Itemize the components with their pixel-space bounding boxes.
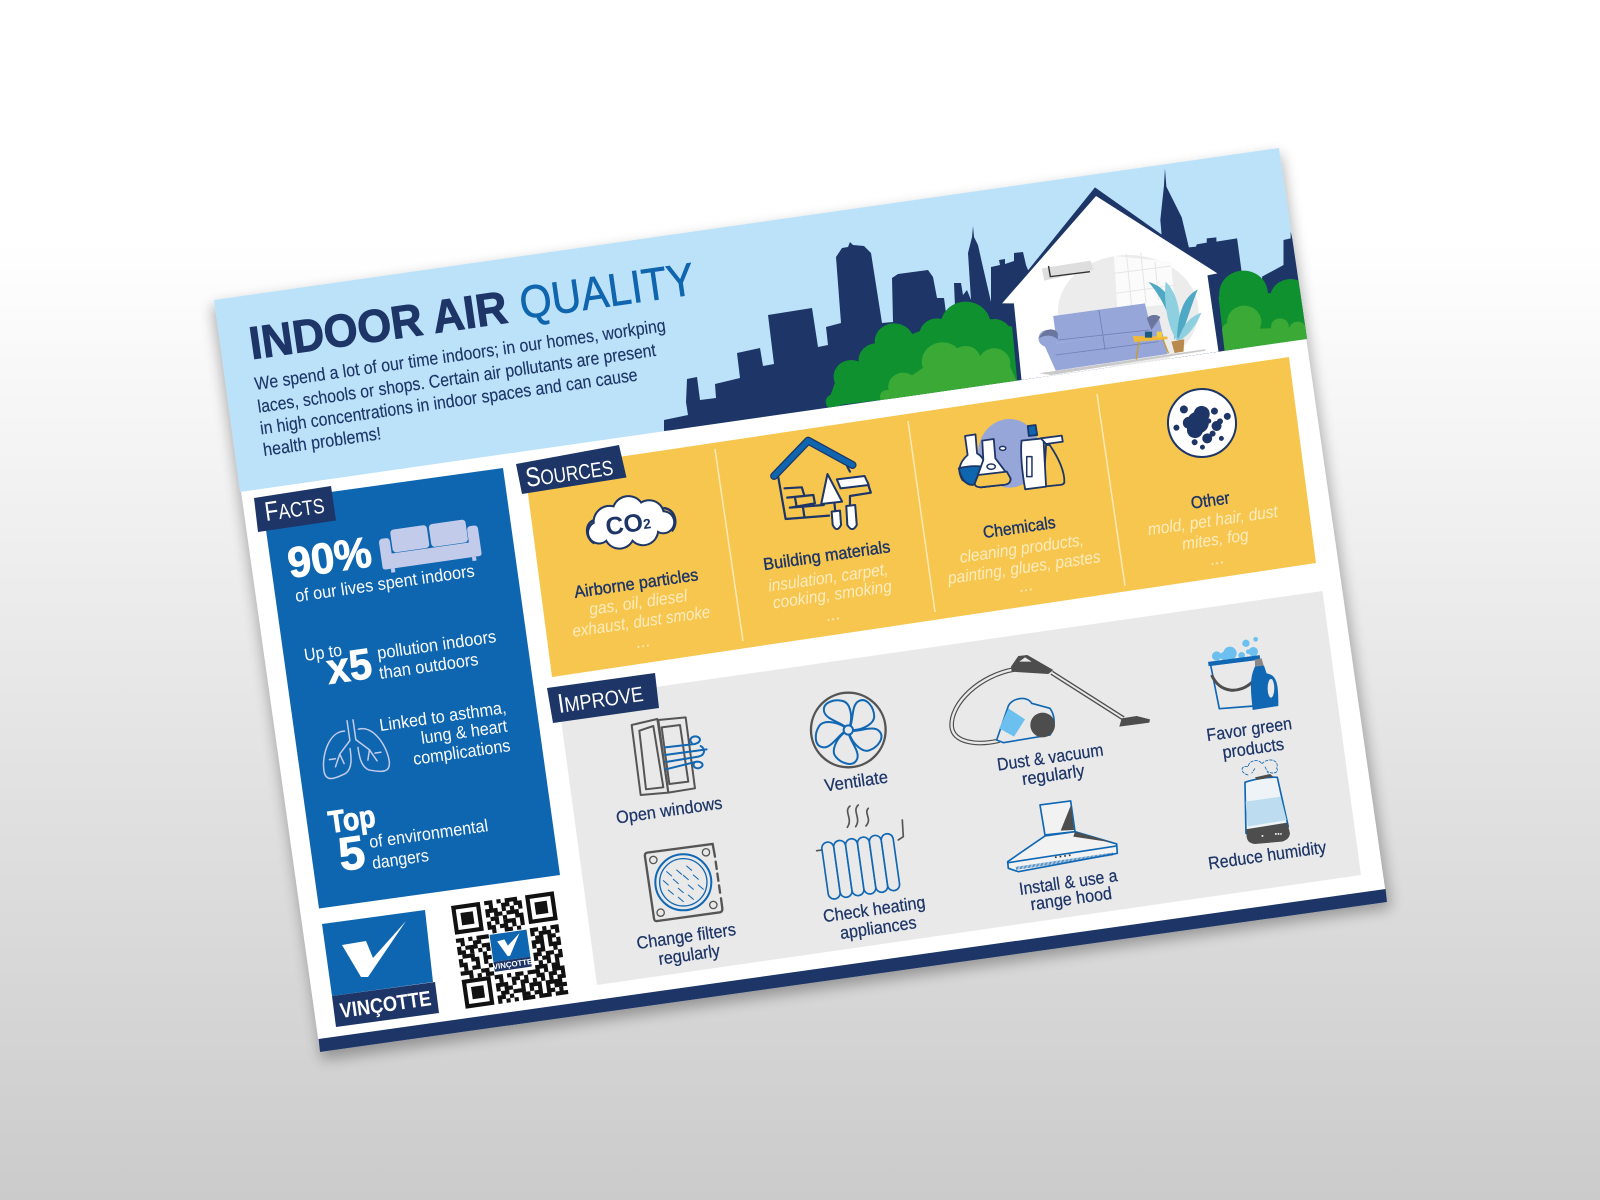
sofa: [1038, 303, 1167, 371]
title: QUALITY: [516, 252, 698, 329]
source: chemicals: [946, 419, 1102, 596]
city skyline, trees and house illustration: [664, 168, 1316, 431]
fact: x5: pollution indoors: [376, 626, 498, 663]
action: range hood: range hood: [1029, 883, 1113, 914]
fact: x5: [303, 626, 498, 694]
fact: linked to asthma: Linked to asthma,: [378, 697, 508, 735]
fact: x5: x5: [324, 640, 375, 694]
source: airborne particles: ...: [635, 631, 652, 652]
icon: lungs: [317, 716, 391, 780]
icon: CO2 cloud: CO: [604, 508, 645, 541]
logo: Vinçotte: [322, 910, 439, 1027]
source: chemicals: Chemicals: [982, 513, 1057, 542]
source: other: Other: [1190, 488, 1231, 513]
icon: mold in petri dish: [1164, 385, 1240, 461]
action: change filters: [635, 844, 737, 969]
action: ventilate: Ventilate: [823, 767, 889, 795]
panel: facts: [254, 468, 560, 908]
action: change filters: Change filters: [635, 919, 737, 953]
icon: CO2 cloud: 2: [642, 515, 652, 532]
fact: linked to asthma: complications: [412, 735, 512, 769]
action: favor green products: Favor green: [1205, 713, 1293, 745]
trees right: [1219, 271, 1316, 351]
icon: vacuum cleaner: [952, 655, 1150, 743]
icon: filter: [645, 844, 722, 921]
fact: 90%: of our lives spent indoors: [294, 560, 476, 606]
action: open windows: [615, 717, 724, 828]
intro paragraph: in high concentrations in indoor spaces and can cause: [259, 365, 639, 438]
trees left: [826, 302, 1017, 409]
fact: linked to asthma: [317, 697, 512, 780]
action: favor green products: [1205, 637, 1293, 762]
improve tag: IMPROVE: [556, 677, 645, 719]
source: airborne particles: gas, oil, diesel: [588, 586, 690, 619]
intro paragraph: [253, 315, 667, 460]
source: building materials: insulation, carpet,: [767, 560, 889, 596]
fact: top 5: [326, 799, 489, 881]
QR code: [451, 891, 568, 1009]
action: dust and vacuum: [952, 655, 1150, 789]
icon: CO2 cloud: [583, 491, 678, 552]
fact: x5: than outdoors: [378, 649, 480, 683]
panel: sources: [516, 357, 1316, 677]
icon: fan: [811, 693, 886, 767]
source: other: mold, pet hair, dust: [1147, 502, 1280, 539]
fact: top 5: Top: [326, 799, 378, 840]
action: favor green products: products: [1221, 734, 1285, 762]
source: other: mites, fog: [1181, 525, 1250, 554]
air conditioner: [1042, 261, 1094, 281]
source: airborne particles: exhaust, dust smoke: [571, 602, 711, 641]
floor shadow: [1039, 349, 1206, 375]
title: [246, 252, 698, 369]
icon: house under construction: [774, 441, 871, 529]
action: open windows: Open windows: [615, 793, 724, 828]
icon: sofa: [377, 517, 482, 574]
source: airborne particles: [571, 491, 711, 652]
facts tag: FACTS: [263, 489, 326, 527]
action: reduce humidity: [1207, 760, 1328, 873]
fact: 90%: 90%: [285, 528, 375, 588]
action: change filters: regularly: [657, 940, 721, 969]
action: check heating: [817, 805, 927, 943]
header: sky background: [214, 148, 1307, 492]
dividers: [715, 394, 1125, 641]
title: INDOOR AIR: [246, 281, 510, 369]
icon: humidifier: [1242, 760, 1290, 844]
source: building materials: [762, 441, 893, 625]
fact: top 5: dangers: [371, 845, 430, 873]
intro paragraph: health problems!: [262, 423, 382, 460]
source: building materials: Building materials: [762, 537, 891, 574]
source: building materials: ...: [825, 604, 842, 625]
action: dust and vacuum: Dust & vacuum: [996, 740, 1105, 775]
icon: window: [632, 717, 707, 795]
source: other: [1147, 385, 1280, 569]
source: building materials: cooking, smoking: [771, 577, 893, 612]
panel: improve: [547, 591, 1361, 985]
QR centre logo: VINÇOTTE: [492, 957, 533, 972]
house: [1022, 187, 1222, 380]
fact: 90%: [285, 517, 482, 606]
icon: range hood: [1008, 801, 1117, 872]
room: wall circle and window: [1058, 255, 1199, 368]
fact: linked to asthma: lung & heart: [420, 716, 509, 748]
sources tag: SOURCES: [524, 451, 615, 493]
icon: flasks and cleaning bottles: [959, 419, 1064, 489]
plant: [1149, 282, 1201, 353]
action: ventilate: [811, 693, 889, 795]
action: range hood: [1008, 801, 1119, 914]
infographic card: [214, 148, 1387, 1052]
icon: radiator: [817, 805, 903, 900]
action: range hood: Install & use a: [1018, 865, 1119, 899]
facts tag: [254, 486, 336, 532]
fact: top 5: 5: [335, 825, 368, 881]
fact: top 5: of environmental: [368, 815, 489, 852]
icon: bucket and detergent: [1208, 637, 1278, 710]
side table: [1133, 332, 1169, 359]
source: chemicals: cleaning products,: [959, 530, 1085, 567]
action: check heating: appliances: [839, 912, 918, 943]
source: chemicals: painting, glues, pastes: [946, 547, 1102, 588]
footer strip: [318, 889, 1387, 1052]
intro paragraph: We spend a lot of our time indoors; in our homes, workping: [253, 315, 667, 394]
source: airborne particles: Airborne particles: [573, 565, 699, 602]
source: chemicals: ...: [1018, 575, 1035, 596]
source: other: ...: [1209, 548, 1226, 569]
action: dust and vacuum: regularly: [1021, 760, 1086, 789]
improve tag: [547, 673, 659, 723]
intro paragraph: laces, schools or shops. Certain air pollutants are present: [256, 340, 657, 417]
fact: x5: Up to: [303, 640, 343, 665]
logo: Vinçotte: VINÇOTTE: [338, 987, 433, 1023]
action: check heating: Check heating: [822, 892, 927, 926]
action: reduce humidity: Reduce humidity: [1207, 837, 1328, 873]
